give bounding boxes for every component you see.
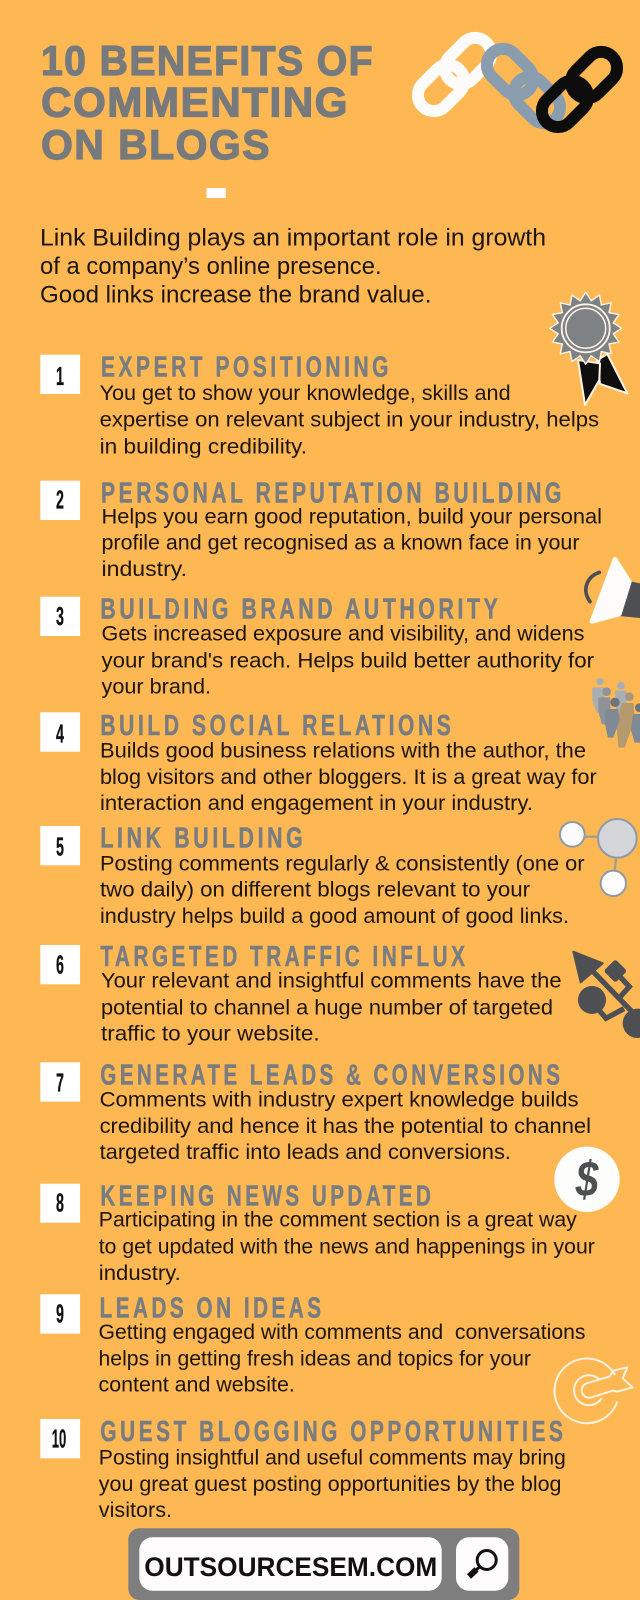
body 5: two daily) on different blogs relevant to your <box>100 879 530 902</box>
body 4 <box>100 739 597 815</box>
body 3 <box>102 623 594 698</box>
number badge 9 <box>40 1294 80 1334</box>
intro text: Link Building plays an important role in growth <box>40 224 546 251</box>
body 2: Helps you earn good reputation, build your personal <box>102 505 602 528</box>
title: ON BLOGS <box>41 121 271 168</box>
number badge 4 <box>40 712 80 752</box>
body 2: industry. <box>102 558 187 581</box>
body 8: Participating in the comment section is a great way <box>99 1209 577 1232</box>
white dash <box>206 188 226 198</box>
title: 10 BENEFITS OF <box>41 37 374 84</box>
intro text <box>40 224 546 309</box>
number badge 6 <box>40 945 80 984</box>
number badge 9: 9 <box>56 1300 64 1328</box>
body 1 <box>100 382 599 458</box>
number badge 5: 5 <box>56 833 64 862</box>
url box <box>139 1537 442 1591</box>
body 3: Gets increased exposure and visibility, and widens <box>102 623 584 646</box>
heading 5: LINK BUILDING <box>100 823 306 855</box>
number badge 10 <box>40 1419 80 1458</box>
number badge 8: 8 <box>56 1189 64 1218</box>
heading 3: BUILDING BRAND AUTHORITY <box>100 593 501 625</box>
body 1: expertise on relevant subject in your industry, helps <box>100 409 599 432</box>
panel: item 7 <box>40 1059 591 1164</box>
number badge 2 <box>40 481 80 520</box>
heading 6: TARGETED TRAFFIC INFLUX <box>100 941 468 973</box>
body 1: in building credibility. <box>100 435 307 458</box>
heading 9: LEADS ON IDEAS <box>100 1292 325 1324</box>
number badge 3 <box>40 597 80 636</box>
body 8: to get updated with the news and happenings in your <box>99 1235 595 1258</box>
icon: dollar coin: $ <box>575 1151 599 1207</box>
body 9 <box>98 1321 586 1397</box>
intro text: Good links increase the brand value. <box>40 282 431 309</box>
number badge 6: 6 <box>56 951 64 979</box>
title: COMMENTING <box>41 79 349 126</box>
icon: target with dart <box>555 1359 633 1423</box>
body 3: your brand's reach. Helps build better authority for <box>102 649 594 672</box>
body 2 <box>102 505 602 581</box>
body 2: profile and get recognised as a known face in your <box>102 531 580 554</box>
panel: item 1 <box>40 352 599 458</box>
icon: dollar coin <box>554 1147 620 1212</box>
number badge 7 <box>40 1062 80 1102</box>
body 7: targeted traffic into leads and conversions. <box>100 1141 511 1164</box>
body 9: Getting engaged with comments and conversations <box>98 1321 586 1344</box>
heading 1: EXPERT POSITIONING <box>101 352 392 384</box>
number badge 5 <box>40 826 80 865</box>
body 1: You get to show your knowledge, skills and <box>100 382 511 405</box>
number badge 1: 1 <box>56 363 64 391</box>
icon: network nodes <box>560 819 637 896</box>
body 3: your brand. <box>102 675 211 698</box>
icon: megaphone <box>586 559 640 621</box>
body 4: interaction and engagement in your industry. <box>100 792 533 815</box>
number badge 7: 7 <box>56 1069 64 1098</box>
body 8 <box>99 1209 595 1285</box>
number badge 2: 2 <box>56 486 64 515</box>
heading 8: KEEPING NEWS UPDATED <box>100 1180 434 1212</box>
body 10: you great guest posting opportunities by the blog <box>99 1473 562 1496</box>
body 6 <box>101 970 562 1045</box>
url box: OUTSOURCESEM.COM <box>144 1552 437 1582</box>
panel: item 9 <box>40 1292 586 1397</box>
body 5: industry helps build a good amount of good links. <box>100 905 569 928</box>
body 5 <box>100 852 585 928</box>
body 5: Posting comments regularly & consistently (one or <box>100 852 585 875</box>
body 7: credibility and hence it has the potential to channel <box>100 1115 591 1138</box>
heading 4: BUILD SOCIAL RELATIONS <box>100 710 454 742</box>
number badge 1 <box>40 355 80 394</box>
body 6: traffic to your website. <box>101 1022 320 1045</box>
body 10: Posting insightful and useful comments may bring <box>99 1446 566 1469</box>
icon: people group <box>593 678 640 747</box>
body 9: content and website. <box>98 1374 295 1397</box>
body 4: Builds good business relations with the author, the <box>100 739 586 762</box>
body 6: potential to channel a huge number of targeted <box>101 996 553 1019</box>
footer search bar <box>128 1528 519 1600</box>
panel: item 10 <box>40 1416 566 1522</box>
intro text: of a company’s online presence. <box>40 253 382 280</box>
number badge 8 <box>40 1184 80 1223</box>
body 10 <box>99 1446 566 1522</box>
icon: magnifier <box>456 1537 508 1591</box>
body 7: Comments with industry expert knowledge builds <box>100 1089 579 1112</box>
title <box>41 37 374 168</box>
number badge 4: 4 <box>56 720 64 749</box>
body 10: visitors. <box>99 1499 172 1522</box>
number badge 10: 10 <box>52 1425 66 1454</box>
panel: item 6 <box>40 941 562 1045</box>
panel: item 2 <box>40 477 602 581</box>
panel: item 4 <box>40 710 597 815</box>
number badge 3: 3 <box>56 603 64 631</box>
body 8: industry. <box>99 1262 181 1285</box>
body 6: Your relevant and insightful comments have the <box>101 970 562 993</box>
panel: item 8 <box>40 1180 595 1285</box>
body 4: blog visitors and other bloggers. It is a great way for <box>100 766 597 789</box>
body 7 <box>100 1089 591 1164</box>
icon: chain links <box>411 31 624 134</box>
panel: item 3 <box>40 593 594 698</box>
panel: item 5 <box>40 823 585 928</box>
body 9: helps in getting fresh ideas and topics for your <box>98 1347 531 1370</box>
icon: medal <box>550 292 627 405</box>
icon: usb symbol <box>573 952 640 1038</box>
